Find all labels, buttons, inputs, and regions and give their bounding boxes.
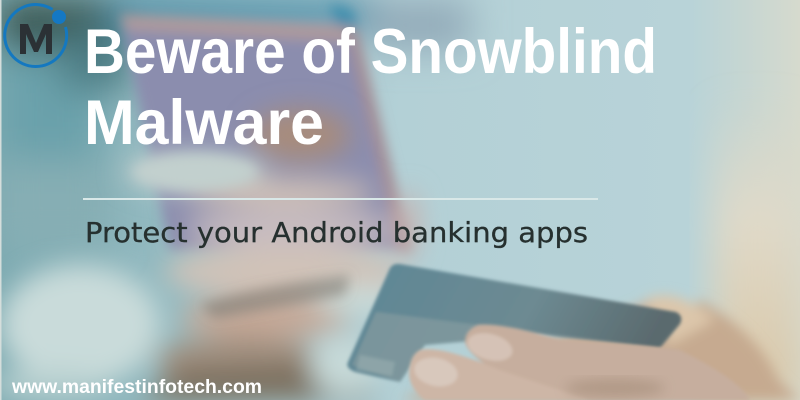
credit card: [347, 264, 681, 382]
title: Malware: [84, 88, 324, 158]
logo: M in blue ring: [5, 5, 67, 67]
right hand holding card: [400, 296, 800, 400]
logo letter M: [20, 24, 52, 54]
fingers over card: [409, 325, 750, 400]
subtitle: Protect your Android banking apps: [85, 216, 588, 249]
phone: [120, 4, 412, 252]
divider line: [83, 198, 598, 200]
fingers on phone: [0, 109, 418, 400]
title: [84, 17, 657, 158]
website url: www.manifestinfotech.com: [11, 377, 262, 398]
title: Beware of Snowblind: [84, 17, 657, 87]
